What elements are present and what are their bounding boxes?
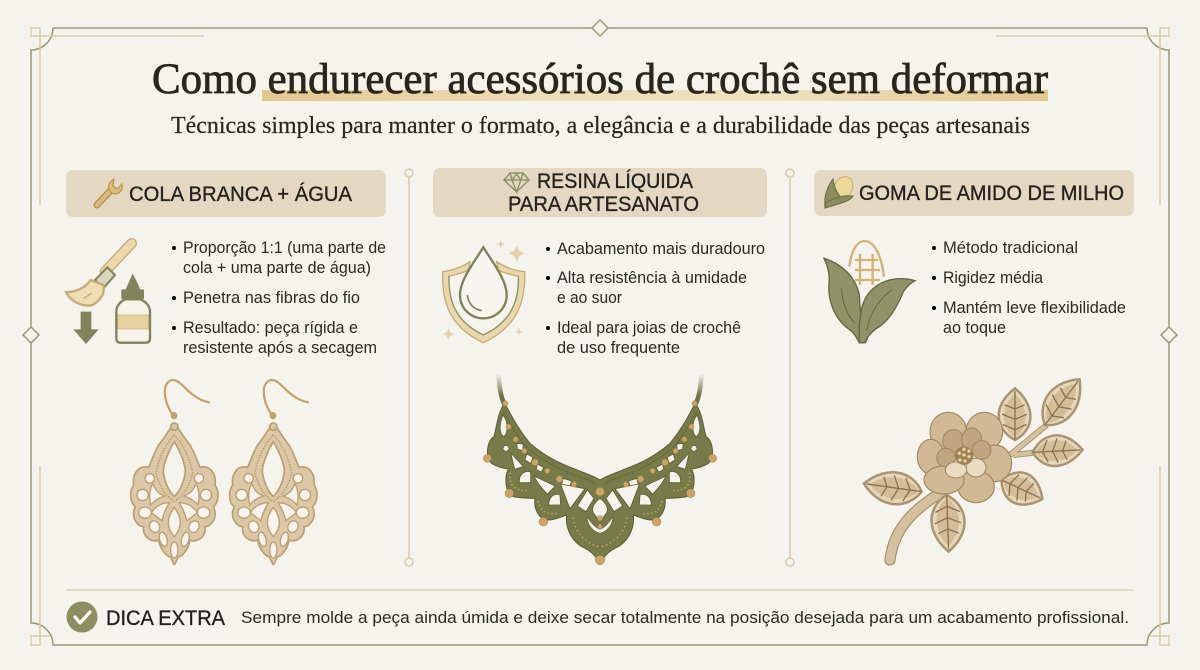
- bullet list: cola branca: Penetra nas fibras do fio: [183, 289, 360, 307]
- bullet list: resina: de uso frequente: [557, 339, 680, 357]
- bullet list: resina: Acabamento mais duradouro: [557, 240, 765, 258]
- header: cola branca: [66, 170, 386, 217]
- bullet list: resina: Alta resistência à umidade: [557, 269, 747, 287]
- bullet list: resina: Ideal para joias de crochê: [557, 319, 741, 337]
- title: Como endurecer acessórios de crochê sem deformar: [152, 56, 1048, 103]
- illustration: crochet necklace: [483, 374, 717, 565]
- illustration: crochet earrings: [131, 380, 317, 565]
- footer tip: [66, 602, 1129, 632]
- bullet list: goma: Método tradicional: [943, 239, 1078, 257]
- icon: down arrow: [73, 312, 99, 344]
- footer divider: [66, 589, 1133, 591]
- bullet list: resina: e ao suor: [557, 289, 623, 307]
- icon: bottle: [116, 273, 150, 343]
- tip text: Sempre molde a peça ainda úmida e deixe secar totalmente na posição desejada para um acabamento profissional.: [241, 608, 1129, 627]
- icon: corn with leaves: [824, 241, 915, 343]
- bullet list: resina: [546, 240, 765, 357]
- tip label: DICA EXTRA: [106, 607, 225, 630]
- title block: [152, 56, 1048, 103]
- icon: sparkles: [443, 240, 525, 340]
- bullet list: goma: Rigidez média: [943, 269, 1043, 287]
- bullet list: goma: Mantém leve flexibilidade: [943, 299, 1126, 317]
- header: resina líquida: PARA ARTESANATO: [508, 193, 699, 216]
- header: cola branca: COLA BRANCA + ÁGUA: [129, 183, 352, 206]
- header: resina líquida: [433, 168, 767, 217]
- bullet list: cola branca: cola + uma parte de água): [183, 259, 371, 277]
- header: resina líquida: RESINA LÍQUIDA: [537, 170, 693, 193]
- illustration: crochet flower branch: [862, 370, 1091, 560]
- dividers: [405, 169, 794, 566]
- icon: check circle: [66, 602, 98, 632]
- bullet list: goma: [932, 239, 1126, 337]
- panel: resina líquida: [433, 168, 767, 565]
- header: goma de amido: [814, 170, 1134, 216]
- panel: cola branca + água: [66, 170, 386, 565]
- bullet list: cola branca: resistente após a secagem: [183, 339, 377, 357]
- bullet list: cola branca: [172, 239, 386, 357]
- bullet list: cola branca: Resultado: peça rígida e: [183, 319, 358, 337]
- subtitle: Técnicas simples para manter o formato, a elegância e a durabilidade das peças artesanais: [171, 113, 1030, 139]
- icon: wrench: [97, 179, 122, 205]
- panel: goma de amido de milho: [814, 170, 1134, 560]
- title highlight: [262, 90, 1048, 101]
- bullet list: cola branca: Proporção 1:1 (uma parte de: [183, 239, 386, 257]
- icon: brush and glue bottle: [66, 243, 150, 344]
- icon: gem: [504, 173, 529, 192]
- header: goma de amido: GOMA DE AMIDO DE MILHO: [859, 182, 1124, 205]
- icon: small corn: [825, 173, 857, 208]
- icon: shield with drop: [443, 240, 525, 343]
- bullet list: goma: ao toque: [943, 319, 1006, 337]
